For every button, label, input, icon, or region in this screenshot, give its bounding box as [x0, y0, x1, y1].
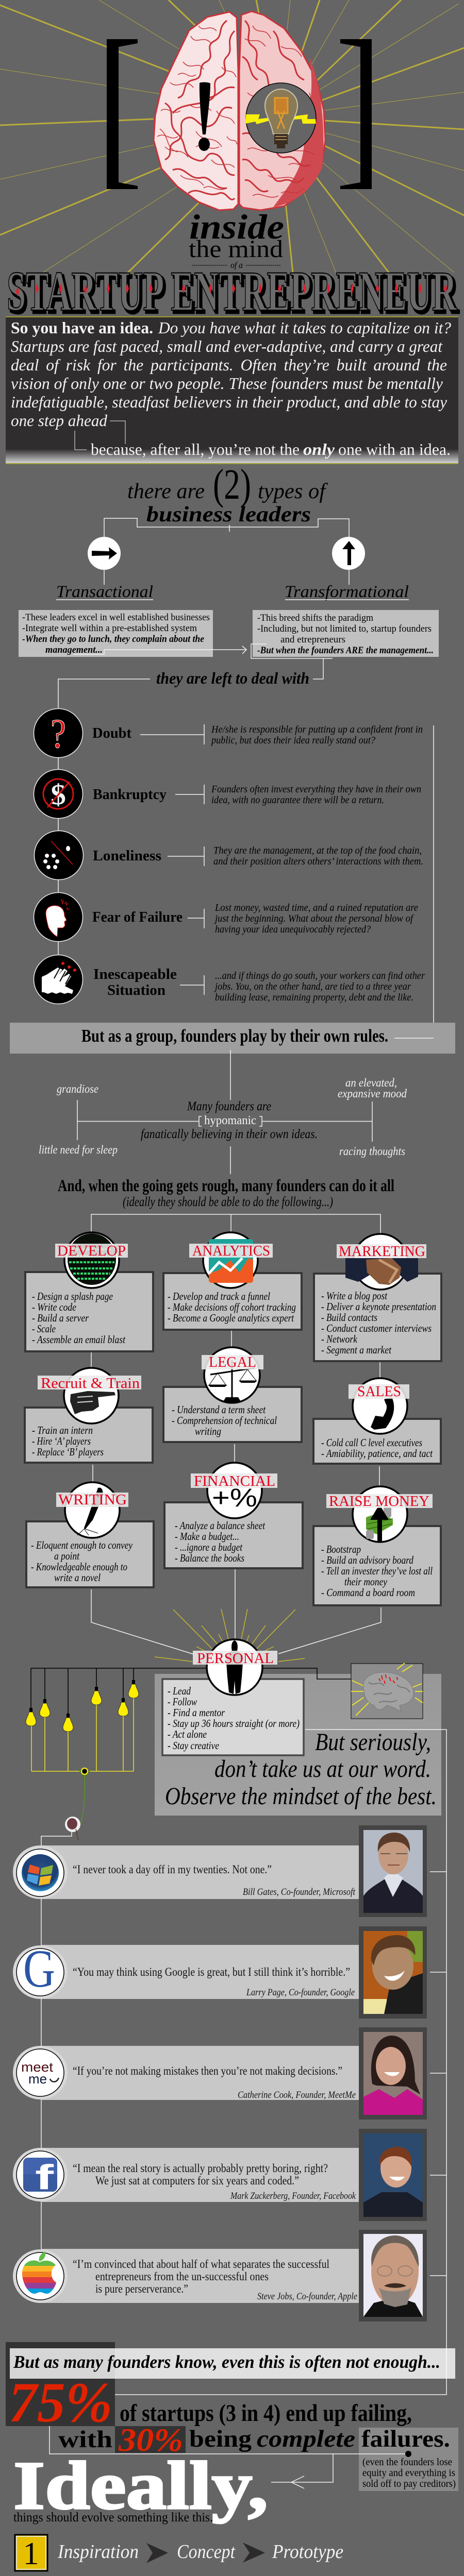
skill: legal: - Comprehension of technical: [172, 1414, 277, 1427]
skill: marketing: - Segment a market: [321, 1344, 392, 1356]
photo: Bill Gates: [359, 1825, 427, 1917]
concern: loneliness: Loneliness: [93, 848, 161, 864]
skill: marketing: - Write a blog post: [321, 1290, 388, 1302]
skill: develop: - Design a splash page: [32, 1290, 113, 1302]
icon: up arrow: [332, 537, 365, 570]
hanging bulbs: [26, 1668, 351, 1771]
diagram: hypomanic traits: Many founders are: [187, 1099, 271, 1113]
photo: Larry Page: [359, 1926, 427, 2019]
quote: Steve Jobs: is pure perserverance.”: [95, 2282, 188, 2295]
concern: doubt: public, but does their idea really stand out?: [210, 735, 375, 746]
skill: financial: FINANCIAL: [194, 1473, 275, 1489]
concern: fear of failure: [34, 892, 418, 942]
skill: sales: - Amiability, patience, and tact: [321, 1447, 433, 1460]
photo: Catherine Cook: [359, 2027, 427, 2120]
skill: sales: SALES: [357, 1383, 401, 1400]
icon: apple logo: [21, 2251, 58, 2294]
title: inside the mind of a: [189, 207, 284, 270]
step 1: Inspiration: [57, 2541, 139, 2563]
panel: 75 percent dark block: [6, 2342, 115, 2426]
panel: intro: [6, 317, 458, 464]
skill: financial: +%: [212, 1483, 257, 1512]
icon: facebook logo: [23, 2158, 57, 2197]
icon: seedling: [65, 1768, 94, 1840]
skill: develop: DEVELOP: [57, 1243, 126, 1259]
skill: legal: writing: [195, 1425, 221, 1437]
skill: analytics: - Make decisions off cohort tracking: [168, 1301, 296, 1313]
quote: Steve Jobs: Steve Jobs, Co-founder, Apple: [257, 2291, 357, 2302]
icon: exclamation mark: [198, 82, 210, 151]
concern: fear of failure: just the beginning. What about the personal blow of: [213, 913, 414, 924]
concern: loneliness: [34, 831, 423, 880]
quote: Larry Page: “You may think using Google is great, but I still think it’s horrible.”: [73, 1965, 350, 1978]
skill: personal: - Stay up 36 hours straight (or more): [168, 1717, 300, 1730]
icon: light bulb in oval with lightning: [245, 83, 316, 153]
skill: personal: - Follow: [168, 1696, 197, 1708]
panel: transformational description: -Including, but not limited to, startup founders: [257, 623, 432, 634]
panel: intro: deal of risk for the participants. Often they’re built around the: [11, 355, 447, 374]
photo: Steve Jobs: [359, 2230, 427, 2321]
grey note box: [359, 2428, 458, 2491]
arrow: to ideally: [271, 2454, 333, 2488]
diagram: hypomanic traits: little need for sleep: [39, 1143, 118, 1156]
panel: intro: one step ahead: [11, 411, 108, 430]
quote: Catherine Cook: [13, 2027, 446, 2120]
skill: raise money: their money: [344, 1575, 388, 1588]
skill: legal: [163, 1347, 302, 1442]
heading: but seriously: don’t take us at our word.: [214, 1755, 431, 1783]
statistic: 30 percent: [49, 2421, 450, 2458]
grey note box: sold off to pay creditors): [362, 2478, 456, 2489]
heading: ideally: things should evolve something like this.: [13, 2511, 213, 2524]
skill: raise money: - Build an advisory board: [321, 1554, 413, 1566]
statistic: 30 percent: failures.: [361, 2426, 450, 2452]
concern: inescapeable situation: ...and if things do go south, your workers can find other: [215, 970, 425, 981]
skill: financial: - Balance the books: [175, 1552, 244, 1564]
panel: intro: So you have an idea.: [11, 318, 153, 337]
skill: analytics: - Become a Google analytics expert: [168, 1312, 294, 1324]
diagram: hypomanic traits: hypomanic: [204, 1114, 256, 1127]
icon: left bracket: [107, 39, 138, 189]
quote: Mark Zuckerberg: “I mean the real story is actually probably pretty boring, right?: [73, 2162, 328, 2175]
grey note box: (even the founders lose: [362, 2456, 452, 2468]
quote: Catherine Cook: “If you’re not making mistakes then you’re not making decisions.”: [73, 2064, 342, 2077]
skill: marketing: - Network: [321, 1333, 358, 1345]
skill: analytics: ANALYTICS: [192, 1243, 270, 1259]
quote: Mark Zuckerberg: We just sat at computers for six years and coded.”: [95, 2174, 299, 2187]
panel: transactional description: management...: [45, 645, 103, 655]
concern: loneliness: They are the management, at the top of the food chain,: [213, 845, 422, 856]
rays around personal: [155, 1609, 305, 1662]
arrow: transactional to transformational: [58, 644, 333, 708]
skill: legal: LEGAL: [209, 1354, 256, 1370]
skill: sales: [313, 1378, 441, 1464]
concern: bankruptcy: $: [51, 779, 66, 811]
skill: recruit and train: [25, 1368, 153, 1463]
skill: marketing: - Deliver a keynote presentation: [321, 1300, 436, 1313]
heading: but seriously: [165, 1728, 437, 1810]
diagram: hypomanic traits: fanatically believing in their own ideas.: [141, 1127, 318, 1141]
concern: fear of failure: Fear of Failure: [92, 909, 183, 925]
skill: analytics: - Develop and track a funnel: [168, 1290, 270, 1302]
panel: transformational description: and etrepreneurs: [280, 634, 345, 645]
skill: analytics: [163, 1232, 302, 1330]
connector: concern circles spine: [58, 757, 59, 955]
title: inside the mind of a: inside: [189, 207, 284, 246]
skill: writing: WRITING: [58, 1492, 127, 1508]
concern: fear of failure: having your idea unequivocably rejected?: [215, 924, 371, 935]
concern: inescapeable situation: building lease, remaining property, debt and the like.: [215, 992, 413, 1003]
panel: transformational description: -But when the founders ARE the management...: [257, 645, 434, 656]
statistic: 75 percent: [9, 2371, 412, 2434]
statistic: 30 percent: with: [58, 2426, 112, 2453]
panel: founders play by their own rules: But as a group, founders play by their own rules.: [81, 1026, 388, 1046]
quote: Bill Gates: Bill Gates, Co-founder, Microsoft: [243, 1887, 356, 1897]
title: inside the mind of a: the mind: [189, 235, 283, 263]
icon: grey brain with red sparks: [351, 1663, 423, 1719]
concern: fear of failure: Lost money, wasted time, and a ruined reputation are: [214, 902, 418, 913]
statistic: 30 percent: 30%: [118, 2421, 183, 2458]
panel: intro: because, after all, you’re not the: [91, 440, 300, 459]
connector: leaders bracket: [104, 518, 349, 585]
skill: personal: - Find a mentor: [168, 1706, 225, 1719]
heading: transformational: Transformational: [285, 583, 409, 601]
heading: two types of business leaders: types of: [258, 480, 328, 503]
skill: personal: - Lead: [168, 1685, 191, 1697]
step 1: Concept: [177, 2541, 236, 2563]
title: inside the mind of a: of a: [230, 260, 243, 270]
quote: Mark Zuckerberg: Mark Zuckerberg, Founder, Facebook: [230, 2191, 356, 2201]
diagram: hypomanic traits: an elevated,: [345, 1076, 397, 1089]
panel: even this is often not enough: [10, 2348, 455, 2379]
panel: transactional description: -When they go to lunch, they complain about the: [22, 634, 205, 645]
panel: founders play by their own rules: [10, 1023, 455, 1054]
quote: Larry Page: Larry Page, Co-founder, Google: [246, 1987, 355, 1998]
skill: sales: - Cold call C level executives: [321, 1436, 422, 1449]
icon: meetme logo: me: [28, 2071, 47, 2087]
quote: Catherine Cook: Catherine Cook, Founder, MeetMe: [238, 2090, 356, 2100]
quote: Mark Zuckerberg: [13, 2129, 446, 2221]
photo: Mark Zuckerberg: [359, 2129, 427, 2221]
concern: inescapeable situation: Inescapeable: [93, 967, 177, 982]
skill: writing: [26, 1482, 154, 1587]
skill: develop: - Write code: [32, 1301, 76, 1313]
concern: doubt: He/she is responsible for putting up a confident front in: [211, 724, 423, 735]
skill: marketing: MARKETING: [339, 1243, 425, 1260]
heading: two types of business leaders: (2): [213, 461, 251, 509]
quote: Steve Jobs: [13, 2230, 446, 2321]
skill: recruit and train: - Replace ‘B’ players: [32, 1446, 104, 1458]
quote: Steve Jobs: “I’m convinced that about half of what separates the successful: [73, 2258, 329, 2270]
concern: inescapeable situation: [34, 955, 425, 1004]
skill: financial: - ...ignore a budget: [175, 1541, 243, 1553]
panel: intro: indefatiguable, steadfast believers in their product, and able to stay: [11, 393, 448, 411]
concern: inescapeable situation: Situation: [107, 982, 165, 998]
statistic: 75 percent: of startups (3 in 4) end up failing,: [120, 2400, 412, 2427]
skill: raise money: RAISE MONEY: [329, 1493, 429, 1510]
long connector right: [394, 725, 434, 1038]
diagram: hypomanic traits: grandiose: [57, 1082, 98, 1095]
heading: when the going gets rough: [58, 1177, 394, 1209]
icon: windows logo: [22, 1854, 59, 1891]
skill: personal: PERSONAL: [197, 1650, 274, 1667]
panel: intro: Do you have what it takes to capitalize on it?: [158, 318, 451, 337]
grey note box: equity and everything is: [362, 2467, 455, 2479]
skill: personal: - Act alone: [168, 1728, 207, 1740]
concern: loneliness: and their position alters others’ interactions with them.: [213, 856, 423, 867]
diagram: hypomanic traits: racing thoughts: [339, 1145, 405, 1158]
heading: they are left to deal with: they are left to deal with: [156, 669, 309, 687]
heading: but seriously: But seriously,: [315, 1728, 431, 1756]
skill: raise money: - Command a board room: [321, 1586, 415, 1599]
icon: right bracket: [340, 39, 372, 189]
panel: even this is often not enough: But as many founders know, even this is often not enough...: [13, 2352, 440, 2372]
icon: google G: G: [23, 1939, 55, 1998]
connector: skills tree: [91, 1214, 381, 1654]
concern: bankruptcy: idea, with no guarantee there will be a return.: [211, 794, 384, 806]
skill: marketing: - Conduct customer interviews: [321, 1322, 432, 1334]
connector: but seriously to quotes: [41, 1730, 446, 2395]
panel: transformational description: [253, 610, 439, 657]
skill: develop: - Build a server: [32, 1312, 89, 1324]
step 1: Prototype: [272, 2541, 343, 2563]
skill: writing: - Eloquent enough to convey: [31, 1539, 133, 1551]
skill: financial: - Make a budget...: [175, 1530, 239, 1543]
step 1: [15, 2535, 343, 2571]
skill: legal: - Understand a term sheet: [172, 1403, 266, 1416]
statistic: 30 percent: being: [189, 2426, 252, 2452]
skill: raise money: [313, 1486, 441, 1605]
skill: financial: - Analyze a balance sheet: [175, 1519, 266, 1532]
panel: but seriously background: [155, 1674, 441, 1816]
skill: marketing: [314, 1234, 441, 1361]
panel: transformational description: -This breed shifts the paradigm: [257, 613, 373, 623]
skill: recruit and train: Recruit & Train: [41, 1375, 140, 1392]
skill: personal: [162, 1639, 304, 1755]
panel: intro: Startups are fast paced, small and ever-adaptive, and carry a great: [11, 337, 443, 355]
skill: recruit and train: - Train an intern: [32, 1424, 93, 1436]
heading: ideally: Ideally,: [13, 2447, 268, 2523]
skill: financial: [164, 1463, 303, 1568]
skill: develop: - Assemble an email blast: [32, 1333, 126, 1346]
step 1: 1: [23, 2536, 39, 2571]
quote: Bill Gates: “I never took a day off in my twenties. Not one.”: [73, 1863, 272, 1876]
heading: two types of business leaders: [127, 461, 328, 527]
panel: transactional description: [19, 610, 213, 657]
icon: facebook logo: f: [35, 2158, 54, 2197]
panel: transactional description: -These leaders excel in well established businesses: [22, 612, 210, 623]
concern: doubt: Doubt: [92, 725, 132, 741]
heading: transactional: Transactional: [56, 583, 153, 601]
statistic: 30 percent: complete: [257, 2426, 355, 2452]
icon: meetme logo: [21, 2059, 59, 2087]
concern: doubt: [34, 709, 423, 757]
concern: bankruptcy: [34, 770, 421, 818]
concern: bankruptcy: Founders often invest everything they have in their own: [211, 784, 421, 795]
skill: writing: - Knowledgeable enough to: [31, 1561, 127, 1573]
skill: personal: - Stay creative: [168, 1739, 219, 1752]
skill: recruit and train: - Hire ‘A’ players: [32, 1435, 91, 1447]
quote: Steve Jobs: entrepreneurs from the un-successful ones: [95, 2270, 269, 2283]
icon: meetme logo: meet: [21, 2059, 54, 2075]
skill: develop: [25, 1232, 153, 1351]
quote: Bill Gates: [13, 1825, 446, 1917]
quote: Larry Page: [13, 1926, 446, 2019]
heading: two types of business leaders: there are: [127, 480, 205, 503]
skill: marketing: - Build contacts: [321, 1311, 377, 1324]
diagram: hypomanic traits: [39, 1050, 407, 1174]
icon: right arrow: [88, 537, 121, 570]
panel: intro: vision of only one or two people. These founders must be mentally: [11, 374, 443, 393]
heading: two types of business leaders: business leaders: [146, 503, 311, 527]
skill: develop: - Scale: [32, 1323, 56, 1335]
statistic: 75 percent: 75%: [9, 2371, 112, 2434]
skill: writing: write a novel: [54, 1571, 101, 1584]
concern: inescapeable situation: jobs. You, on the other hand, are tied to a three year: [213, 981, 411, 992]
icon: brain: [154, 11, 325, 210]
panel: transactional description: -Integrate well within a pre-established system: [22, 623, 197, 634]
yellow rays behind brain: [0, 0, 464, 273]
diagram: hypomanic traits: expansive mood: [338, 1087, 407, 1100]
concern: doubt: ?: [51, 711, 66, 757]
panel: intro: only: [303, 440, 335, 459]
concern: bankruptcy: Bankruptcy: [93, 787, 167, 803]
panel: intro: one with an idea.: [338, 440, 451, 459]
heading: when the going gets rough: (ideally they should be able to do the following...): [123, 1194, 333, 1209]
skill: raise money: - Tell an invester they’ve lost all: [321, 1565, 433, 1577]
skill: raise money: - Bootstrap: [321, 1543, 361, 1555]
skill: writing: a point: [54, 1550, 80, 1562]
